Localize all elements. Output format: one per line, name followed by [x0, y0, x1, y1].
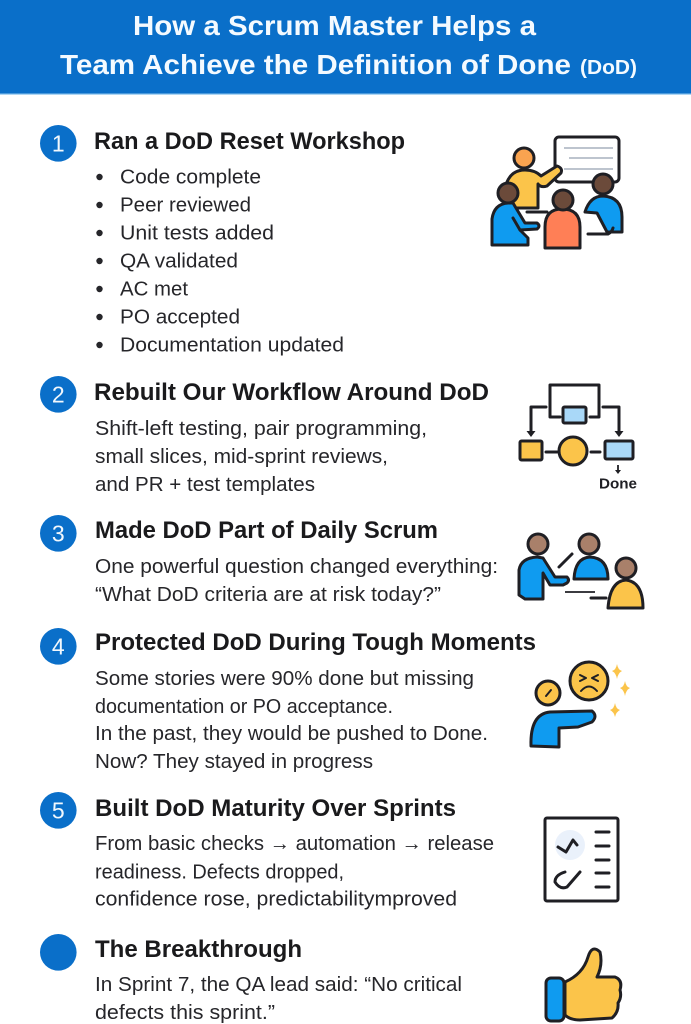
step 5: DoD maturity: 5	[52, 798, 65, 824]
step 2: rebuilt workflow: 2	[52, 382, 65, 408]
checklist of DoD criteria: Documentation updated	[120, 334, 344, 356]
step 2: rebuilt workflow: Rebuilt Our Workflow Around DoD	[94, 379, 489, 406]
step 1: DoD reset workshop: 1	[52, 130, 65, 156]
step 5: DoD maturity: confidence rose, predictabilitymproved	[95, 888, 457, 910]
step 2: rebuilt workflow: and PR + test templates	[95, 474, 315, 496]
step 1: DoD reset workshop	[40, 125, 405, 356]
step 4: protected DoD: documentation or PO acceptance.	[95, 696, 393, 718]
checklist of DoD criteria: Unit tests added	[120, 222, 274, 244]
step 2: rebuilt workflow: Shift-left testing, pair programming,	[95, 418, 427, 440]
step 4: protected DoD: Now? They stayed in progress	[95, 751, 373, 773]
step 3: DoD in daily scrum: “What DoD criteria are at risk today?”	[95, 584, 441, 606]
step 6: the breakthrough: defects this sprint.”	[95, 1002, 275, 1024]
title banner: Team Achieve the Definition of Done	[60, 49, 571, 80]
icon: workflow diagram ending in Done	[520, 385, 637, 492]
step 4: protected DoD: 4	[52, 634, 65, 660]
icon: workflow diagram ending in Done: Done	[599, 476, 637, 492]
step 5: DoD maturity: From basic checks → automation → release	[95, 833, 494, 855]
checklist of DoD criteria: Code complete	[120, 166, 261, 188]
step 5: DoD maturity: Built DoD Maturity Over Sprints	[95, 795, 456, 822]
title banner: How a Scrum Master Helps a	[133, 10, 536, 41]
step 6: the breakthrough: In Sprint 7, the QA lead said: “No critical	[95, 974, 462, 996]
step 6: the breakthrough: The Breakthrough	[95, 936, 302, 963]
step 3: DoD in daily scrum: One powerful question changed everything:	[95, 556, 498, 578]
step 4: protected DoD: Some stories were 90% done but missing	[95, 668, 474, 690]
step 3: DoD in daily scrum: Made DoD Part of Daily Scrum	[95, 517, 438, 544]
checklist of DoD criteria: AC met	[120, 278, 188, 300]
step 4: protected DoD: Protected DoD During Tough Moments	[95, 629, 536, 656]
step 5: DoD maturity	[40, 792, 494, 910]
step 3: DoD in daily scrum: 3	[52, 520, 65, 546]
checklist of DoD criteria	[96, 166, 344, 356]
icon: checklist	[545, 818, 618, 901]
step 6: the breakthrough	[40, 934, 462, 1024]
checklist of DoD criteria: PO accepted	[120, 306, 240, 328]
icon: person facing angry face	[531, 662, 630, 747]
step 4: protected DoD: In the past, they would be pushed to Done.	[95, 723, 488, 745]
title banner	[0, 0, 691, 95]
step 4: protected DoD	[40, 628, 536, 773]
icon: daily scrum conversation	[519, 534, 643, 608]
step 5: DoD maturity: readiness. Defects dropped,	[95, 862, 344, 884]
step 3: DoD in daily scrum	[40, 515, 498, 606]
icon: team workshop at whiteboard	[492, 137, 622, 248]
step 1: DoD reset workshop: Ran a DoD Reset Workshop	[94, 128, 405, 155]
step 2: rebuilt workflow	[40, 376, 489, 496]
step 2: rebuilt workflow: small slices, mid-sprint reviews,	[95, 446, 388, 468]
title banner: (DoD)	[580, 57, 637, 79]
checklist of DoD criteria: Peer reviewed	[120, 194, 251, 216]
icon: thumbs up	[546, 949, 621, 1021]
checklist of DoD criteria: QA validated	[120, 250, 238, 272]
